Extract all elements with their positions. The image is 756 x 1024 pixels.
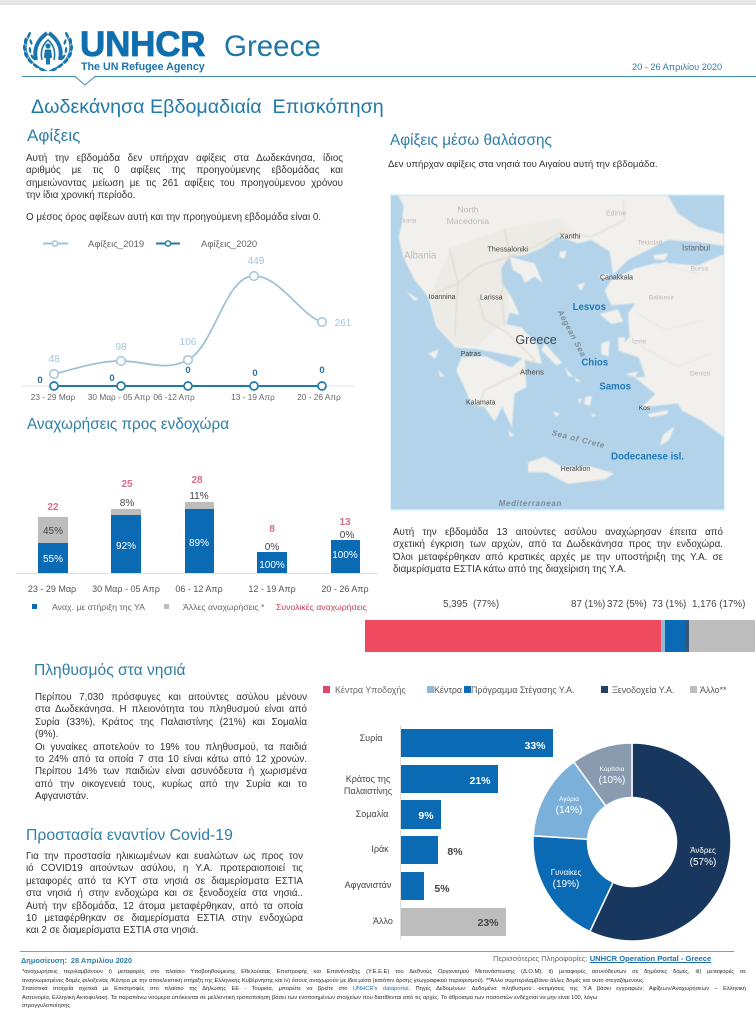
text: arrivals: αριθμός με τις 0 αφίξεις της προηγούμενης εβδομάδας και: [26, 165, 343, 176]
text: departures summary: σχετική έγκριση των αρχών, από τα Δωδεκάνησα προς την ενδοχώρα.: [393, 539, 723, 550]
value labels: 8%: [447, 846, 463, 858]
Chalkidiki: [510, 257, 543, 283]
map labels: Kalamata: [466, 400, 496, 407]
country labels: Σομαλία: [356, 809, 388, 819]
text: covid protection: Αυτή την εβδομάδα, 12 άτομα μεταφέρθηκαν, από τα οποία: [26, 901, 303, 912]
country labels: Ιράκ: [371, 844, 389, 854]
map: Greece and Aegean: Lesvos: [573, 302, 606, 313]
stacked bar values: 5,395 (77%): [443, 599, 499, 610]
series 2020: 0: [252, 368, 258, 379]
text: covid protection: στα νησιά ή στην ενδοχώρα και σε ξενοδοχεία στα νησιά..: [26, 888, 303, 899]
legend: departures: Συνολικές αναχωρήσεις: [276, 602, 367, 612]
bars: [38, 502, 360, 573]
heading: population: Πληθυσμός στα νησιά: [34, 662, 186, 679]
UNHCR percentages: 92%: [116, 541, 136, 552]
map labels: Athens: [520, 368, 544, 377]
text: covid protection: και 2 σε διαμερίσματα ΕΣΤΙΑ στα νησιά.: [26, 925, 198, 936]
legend: departures: Αναχ. με στήριξη της ΥΑ: [52, 602, 145, 612]
stacked bar values: 73 (1%): [652, 599, 686, 610]
text: departures summary: Αυτή την εβδομάδα 13 αιτούντες ασύλου αναχώρησαν έπειτα από: [393, 527, 723, 538]
map: Greece and Aegean: Balıkesir: [649, 294, 675, 301]
country labels: Αφγανιστάν: [345, 880, 392, 890]
map labels: [429, 232, 651, 473]
legend: Αφίξεις_2020: [201, 239, 257, 250]
text: arrivals: [26, 153, 343, 223]
x axis labels: 30 Μαρ - 05 Απρ: [88, 392, 150, 402]
Turkey: [605, 254, 724, 437]
footnote: αναγνωρισμένες δομές φιλοξενίας /Κέντρα με την αποκλειστική στήριξη της Ελληνικής Κυβέρνησης και iv) όσους αναχωρούν με ίδια μέσα (κατόπιν άρσης γεωγραφικού περιορισμού). **Άλλο συμπεριλαμβάνει άλλες δομές και αυτο στεγαζόμενους.: [22, 978, 645, 984]
segment labels: (19%): [553, 879, 579, 890]
text: arrivals: την ίδια χρονική περίοδο.: [26, 190, 135, 201]
x axis labels: 23 - 29 Μαρ: [28, 584, 76, 594]
map: Greece and Aegean: Albania: [404, 251, 437, 262]
footnote: στρογγυλοποίησης: [22, 1003, 70, 1009]
map: Greece and Aegean: [390, 194, 725, 511]
totals: 13: [339, 517, 351, 528]
map: Greece and Aegean: Mediterranean: [499, 499, 562, 508]
map labels: Patras: [461, 351, 481, 358]
UNHCR percentages: 100%: [332, 550, 358, 561]
other percentages: 8%: [120, 498, 134, 509]
value labels: 5%: [434, 883, 450, 895]
stacked bar values: 1,176 (17%): [692, 599, 745, 610]
map: Greece and Aegean: Edirne: [606, 211, 626, 218]
map labels: Heraklion: [561, 466, 590, 473]
segment labels: (14%): [556, 805, 582, 816]
text: population: Συρία (33%), Κράτος της Παλαιστίνης (21%) και Σομαλία: [35, 717, 307, 728]
text: departures summary: διαμερίσματα ΕΣΤΙΑ κάτω από της διαχείριση της Υ.Α.: [393, 564, 626, 575]
x axis labels: [28, 584, 369, 594]
segment labels: Αγόρια: [559, 795, 579, 803]
series 2019: 261: [335, 318, 352, 329]
country labels: [344, 733, 393, 926]
x axis labels: 23 - 29 Μαρ: [31, 392, 76, 402]
roads: [428, 200, 625, 407]
text: covid protection: μεταφορές από τα ΚΥΤ στα νησιά σε διαμερίσματα ΕΣΤΙΑ: [26, 876, 303, 887]
legend: accommodation: Ξενοδοχεία Υ.Α.: [612, 685, 674, 695]
more information link: Περισσότερες Πληροφορίες: UNHCR Operation Portal - Greece: [493, 954, 711, 963]
value labels: 9%: [418, 810, 434, 822]
segment: girls: [574, 743, 632, 806]
series 2019: 106: [180, 337, 197, 348]
stacked bar values: 372 (5%): [607, 599, 647, 610]
other percentages: 0%: [265, 542, 279, 553]
stacked bar values: 87 (1%): [571, 599, 605, 610]
map labels: Thessaloniki: [487, 244, 528, 253]
text: covid protection: Για την προστασία ηλικιωμένων και ευαλώτων ως προς τον: [26, 851, 303, 862]
other percentages: 45%: [43, 526, 63, 537]
totals: 22: [47, 502, 59, 513]
stacked bar: accommodation: [365, 620, 755, 652]
text: population: στα Δωδεκάνησα. Η πλειονότητα του πληθυσμού είναι από: [35, 704, 307, 715]
map: Greece and Aegean: Sea of Crete: [551, 428, 606, 450]
totals: 28: [191, 475, 203, 486]
map labels: Çanakkala: [600, 274, 633, 281]
legend: [43, 239, 257, 250]
footnote: *αναχωρήσεις περιλαμβάνουν i) μεταφορές στο πλαίσιο Υποβοηθούμενης Εθελούσιας Επιστροφής και Επανένταξης (Υ.Ε.Ε.Ε) του Διεθνούς Οργανισμού Μετανάστευσης (Δ.Ο.Μ), ii) μεταφορές ασυνόδευτων σε δημόσιες δομές, iii) μεταφορές σε: [22, 969, 746, 975]
country labels: Παλαιστίνης: [344, 786, 393, 796]
totals: 25: [121, 479, 133, 490]
series 2020: 0: [185, 365, 191, 376]
segment labels: [551, 765, 716, 890]
x axis labels: 12 - 19 Απρ: [248, 584, 296, 594]
series 2019: [48, 256, 352, 378]
text: population: Περίπου 7,030 πρόσφυγες και αιτούντες ασύλου μένουν: [35, 692, 307, 703]
legend: accommodation: Κέντρα: [434, 685, 462, 695]
segment: men: [590, 743, 731, 941]
series 2019: 48: [48, 354, 60, 365]
header: [22, 25, 756, 86]
north mainland and Greece: [398, 195, 724, 364]
text: population: Αφγανιστάν.: [35, 791, 89, 802]
top grey strip: [0, 0, 756, 5]
map: Greece and Aegean: Istanbul: [682, 244, 710, 253]
UNHCR wordmark: UNHCR: [80, 25, 205, 64]
totals: [47, 475, 351, 535]
map: Greece and Aegean: Dodecanese isl.: [611, 451, 684, 462]
map: Greece and Aegean: North: [457, 205, 479, 215]
line chart: arrivals 2019 vs 2020: [21, 239, 355, 402]
totals: 8: [269, 524, 275, 535]
map labels: Greece: [515, 333, 557, 347]
other percentages: 0%: [340, 530, 354, 541]
footnote: [22, 968, 746, 1009]
country labels: Συρία: [360, 733, 382, 743]
bar chart: population by nationality: [344, 725, 553, 940]
legend: Αφίξεις_2019: [88, 239, 144, 250]
text: arrivals: σημειώνοντας μείωση με τις 261 αφίξεις του προηγούμενου χρόνου: [26, 178, 343, 189]
text: population: το 24% από τα οποία 7 στα 10 είναι κάτω από 12 χρονών.: [35, 754, 307, 765]
segment: women: [533, 836, 613, 932]
series 2020: 0: [109, 373, 115, 384]
text: population: [35, 692, 307, 802]
agency tagline: The UN Refugee Agency: [81, 61, 205, 73]
map: Greece and Aegean: Bursa: [691, 266, 708, 273]
bars: [401, 729, 553, 936]
segment: boys: [533, 762, 606, 839]
UNHCR percentages: [43, 538, 358, 571]
map labels: Ioannina: [429, 294, 456, 301]
date range: 20 - 26 Απριλίου 2020: [632, 62, 722, 72]
legend: accommodation: Άλλο**: [700, 685, 727, 695]
other percentages: [43, 491, 354, 553]
text: population: από την οικογενειά τους, κυρίως από την Συρία και το: [35, 779, 307, 790]
UNHCR percentages: 89%: [189, 538, 209, 549]
map: Greece and Aegean: Tirana: [399, 219, 417, 225]
footnote: Αστυνομία, Ελληνική Ακτοφυλακή. Τα παραπάνω νούμερα υπόκεινται σε μελλοντική τροποποίηση βάσει των ενοποιημένων στοιχείων που διατίθενται από τις αρχές. Το άθροισμα των ποσοστών ενδέχεται να μην είναι 100, λόγω: [22, 994, 597, 1000]
header rule with chevron: [22, 76, 756, 86]
value labels: [418, 740, 546, 929]
series 2020: 0: [37, 375, 43, 386]
text: population: (9%).: [35, 729, 58, 740]
legend: departures: Άλλες αναχωρήσεις *: [183, 602, 264, 612]
segment labels: Γυναίκες: [551, 868, 581, 877]
legend: accommodation: Πρόγραμμα Στέγασης Υ.Α.: [471, 685, 575, 695]
UNHCR percentages: 100%: [259, 560, 285, 571]
text: population: Περίπου 14% των παιδιών είναι ασυνόδευτα ή χωρισμένα: [35, 766, 307, 777]
heading: covid protection: Προστασία εναντίον Covid-19: [26, 827, 233, 844]
segment labels: (10%): [599, 775, 625, 786]
text: departures summary: [392, 527, 723, 575]
stacked bar values: [443, 599, 745, 610]
value labels: 33%: [524, 740, 546, 752]
footnote: Στατιστικά στοιχεία σχετικά με Επιστροφές στο πλαίσιο της Δήλωσης ΕΕ - Τουρκία, μπορείτε να βρείτε στο UNHCR's dataportal. Πηγές Δεδομένων: Δεδομένα πληθυσμού -εκτιμήσεις της Υ.Α βάσει εγγραφών; Αφίξεων/Αναχωρήσεων – Ελληνική: [22, 986, 746, 992]
map labels: Larissa: [480, 295, 503, 302]
map: Greece and Aegean: Chios: [581, 358, 608, 369]
x axis labels: 13 - 19 Απρ: [231, 392, 275, 402]
map: Greece and Aegean: Samos: [599, 382, 631, 393]
x axis labels: 30 Μαρ - 05 Απρ: [92, 584, 160, 594]
publication date: Δημοσίευση: 28 Απριλίου 2020: [21, 956, 132, 965]
series 2019: 98: [115, 342, 127, 353]
islands: [600, 309, 623, 324]
segment labels: Άνδρες: [690, 846, 716, 855]
heading: arrivals: Αφίξεις: [27, 126, 80, 145]
value labels: 21%: [469, 775, 491, 787]
segment labels: Κορίτσια: [600, 765, 625, 773]
x axis labels: 20 - 26 Απρ: [321, 584, 369, 594]
title: Δωδεκάνησα Εβδομαδιαία Επισκόπηση: [31, 96, 384, 118]
series 2020: [37, 365, 326, 390]
map: Greece and Aegean: Aegean Sea: [555, 307, 588, 359]
map: Greece and Aegean: Tekirdağ: [637, 240, 663, 247]
heading: departures: Αναχωρήσεις προς ενδοχώρα: [27, 416, 229, 433]
x axis labels: 06 -12 Απρ: [153, 392, 195, 402]
icon: UNHCR logo laurel and sheltering hands: [22, 31, 74, 72]
legend: accommodation: [323, 685, 727, 695]
donut chart: population by age and gender: [534, 744, 730, 940]
country labels: Άλλο: [373, 916, 393, 926]
other percentages: 11%: [189, 491, 209, 502]
text: arrivals: Ο μέσος όρος αφίξεων αυτή και την προηγούμενη εβδομάδα είναι 0.: [26, 212, 321, 223]
legend: accommodation: Κέντρα Υποδοχής: [335, 685, 406, 695]
map: Greece and Aegean: Denizli: [690, 370, 710, 377]
text: covid protection: 10 μεταφέρθηκαν σε διαμερίσματα ΕΣΤΙΑ στην ενδοχώρα: [26, 913, 303, 924]
UNHCR percentages: 55%: [43, 554, 63, 565]
series 2020: 0: [319, 365, 325, 376]
land shading north Greece: [430, 218, 578, 347]
map: Greece and Aegean: Macedonia: [447, 216, 489, 226]
heading: sea arrivals: Αφίξεις μέσω θαλάσσης: [390, 132, 552, 149]
x axis labels: [31, 392, 341, 402]
map labels: Kos: [639, 405, 651, 412]
text: sea arrivals: Δεν υπήρχαν αφίξεις στα νησιά του Αιγαίου αυτή την εβδομάδα.: [388, 159, 658, 170]
text: population: Οι γυναίκες αποτελούν το 19% του πληθυσμού, τα παιδιά: [35, 742, 307, 753]
stacked bar chart: departures to mainland: [16, 475, 378, 594]
country labels: Κράτος της: [346, 774, 391, 784]
x axis labels: 20 - 26 Απρ: [297, 392, 341, 402]
Greece label: Greece: [224, 30, 321, 63]
segment labels: (57%): [690, 857, 716, 868]
text: departures summary: Όλοι μεταφέρθηκαν από κρατικές αρχές με την υποστήριξη της Υ.Α. σε: [393, 552, 723, 563]
text: arrivals: Αυτή την εβδομάδα δεν υπήρχαν αφίξεις στα Δωδεκάνησα, ίδιος: [26, 153, 343, 164]
series 2019: 449: [248, 256, 265, 267]
legend: departures: [32, 602, 367, 612]
map: Greece and Aegean: İzmir: [632, 336, 647, 345]
x axis labels: 06 - 12 Απρ: [175, 584, 223, 594]
Crete: [528, 457, 614, 484]
footer rule: [20, 951, 734, 952]
map labels: Xanthi: [560, 232, 581, 241]
value labels: 23%: [477, 917, 499, 929]
text: covid protection: [26, 851, 303, 936]
text: covid protection: ιό COVID19 αιτούντων ασύλου, η Υ.Α. προτεραιοποιεί τις: [26, 863, 303, 874]
Peloponnese: [456, 356, 526, 427]
